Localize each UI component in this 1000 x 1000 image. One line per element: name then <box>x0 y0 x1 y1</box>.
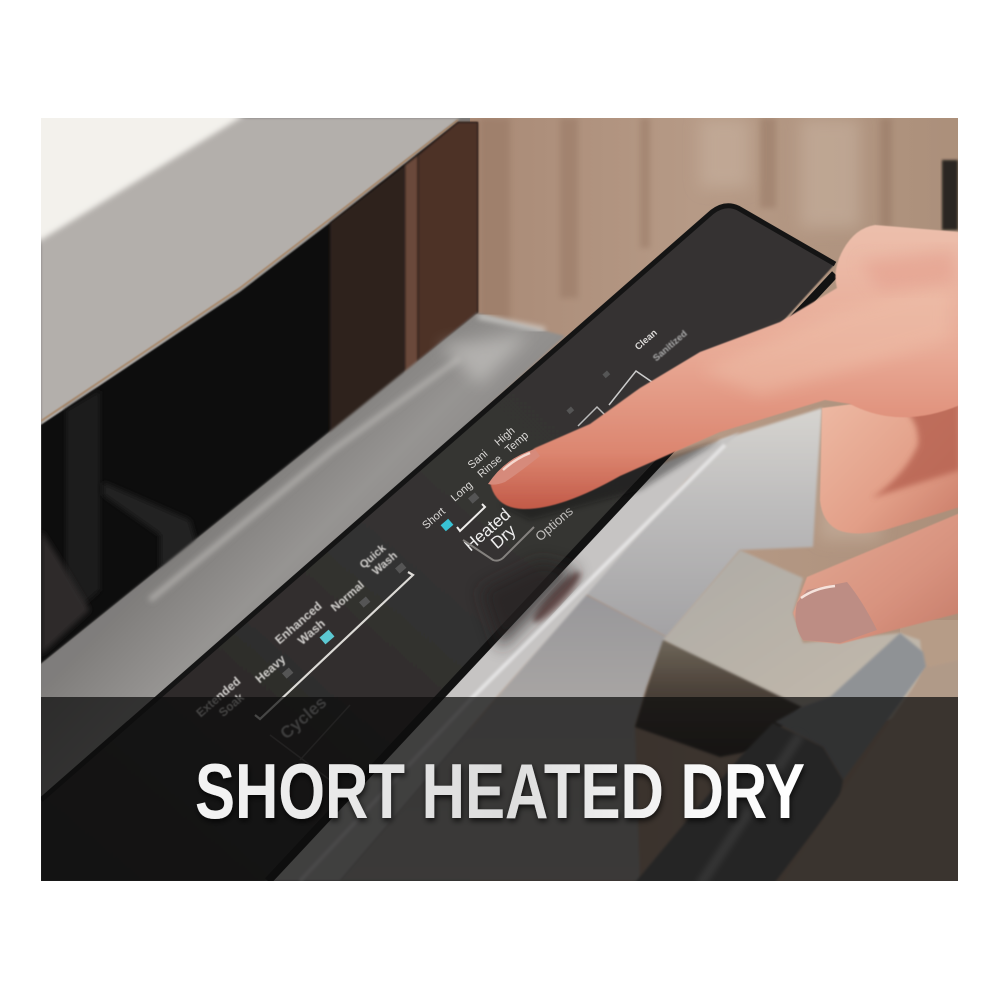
option labels: Long <box>449 479 475 504</box>
stainless door lower plane <box>340 593 667 881</box>
cycle labels: Wash <box>370 550 400 578</box>
photograph background <box>30 110 970 890</box>
cycle labels <box>193 542 400 743</box>
cycle labels: Heavy <box>252 652 289 686</box>
infographic photo scene and caption <box>41 118 958 881</box>
wood cabinet <box>470 110 970 890</box>
option labels: Dry <box>487 521 520 553</box>
cycle labels: Wash <box>295 616 328 648</box>
cycle labels: Soak <box>216 690 247 720</box>
hand redness <box>869 252 954 287</box>
stainless tub lip <box>41 312 564 697</box>
thumb <box>793 513 960 644</box>
palm shadow crease <box>875 406 958 498</box>
index nail <box>488 449 540 485</box>
cycle labels: Quick <box>358 542 389 571</box>
option labels: Heated <box>460 505 514 555</box>
cycle labels: Normal <box>329 579 367 614</box>
knuckle highlight <box>716 316 941 394</box>
indicator lights <box>282 371 610 679</box>
cycle labels: Enhanced <box>272 599 325 647</box>
option labels: Clean <box>633 327 660 353</box>
index finger and back of hand <box>490 225 960 509</box>
countertop <box>30 110 460 425</box>
finger shadow on panel <box>500 440 720 520</box>
hand <box>488 225 960 644</box>
option labels: Sanitized <box>651 328 690 364</box>
caption band <box>41 697 958 881</box>
option labels: Rinse <box>475 453 505 480</box>
option labels: Temp <box>503 429 531 456</box>
thumb nail <box>795 582 877 643</box>
control panel <box>41 206 835 881</box>
door handle <box>634 550 926 881</box>
option labels: Short <box>420 506 448 532</box>
stainless door upper plane <box>583 408 822 637</box>
dark dishwasher opening <box>41 122 478 664</box>
caption text: SHORT HEATED DRY <box>195 747 805 835</box>
middle finger <box>820 404 958 534</box>
option labels <box>420 327 690 555</box>
cycle labels: Cycles <box>276 693 330 743</box>
option labels: Options <box>532 503 576 544</box>
cycle labels: Extended <box>193 674 243 720</box>
glass edge strip <box>262 432 740 881</box>
option labels: Sani <box>466 448 490 471</box>
selector brackets and buttons <box>255 371 652 780</box>
option labels: High <box>493 425 518 449</box>
